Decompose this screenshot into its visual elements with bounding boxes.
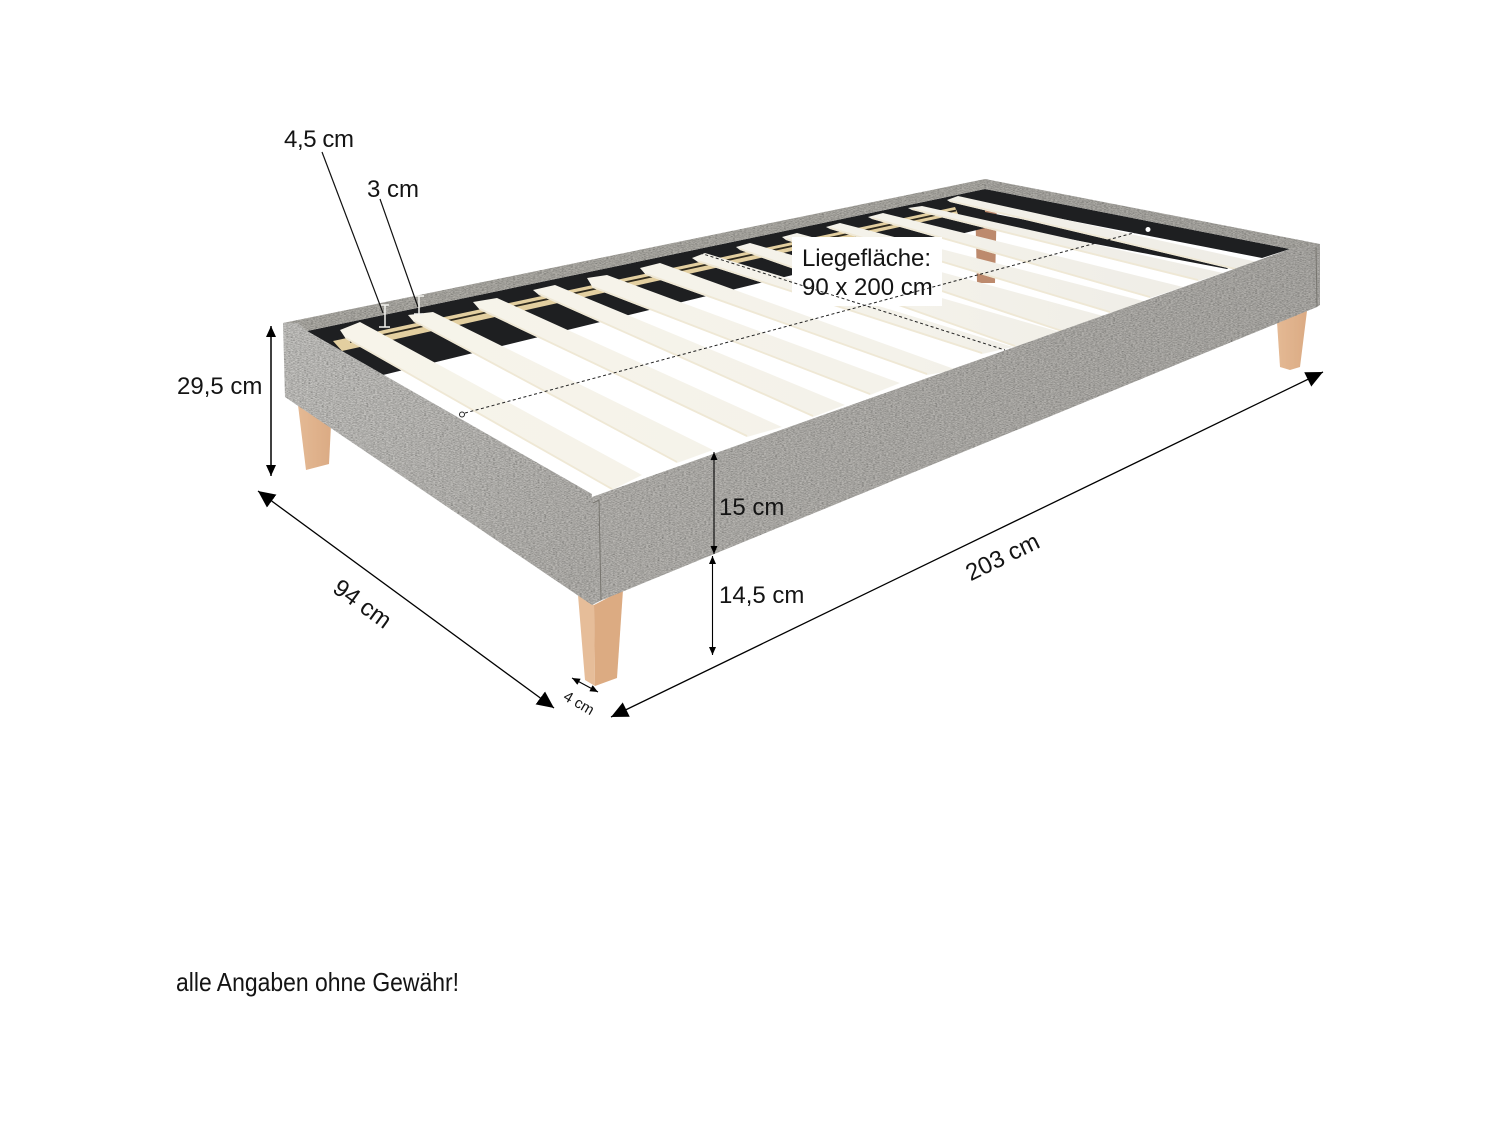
dimension: leg height 14,5 cm: 14,5 cm: [719, 582, 804, 609]
far leg seen through slats: [975, 198, 997, 283]
dimension: length 203 cm: [611, 372, 1323, 717]
dimension: frame height 15 cm: 15 cm: [719, 494, 784, 521]
slat dimension: 3 cm: 3 cm: [367, 176, 419, 203]
dark base band under the slats: [307, 189, 1290, 375]
label box: sleeping surface: [792, 237, 942, 306]
label box: sleeping surface: 90 x 200 cm: [802, 274, 933, 301]
disclaimer: alle Angaben ohne Gewähr!: [176, 967, 459, 997]
slat dimension: 3 cm: [367, 176, 424, 314]
left leg: [298, 405, 331, 470]
dimension: width 94 cm: 94 cm: [328, 574, 396, 634]
dimension: width 94 cm: [258, 491, 554, 708]
wooden cross beam: [333, 207, 958, 351]
corner seams: [593, 247, 1317, 600]
dimension: length 203 cm: 203 cm: [961, 528, 1044, 587]
long front panel: [592, 244, 1320, 605]
dimension: height 29,5 cm: 29,5 cm: [177, 373, 262, 400]
dimension: leg width 4 cm: 4 cm: [560, 688, 597, 719]
back rim: [283, 179, 1320, 331]
slats: [340, 196, 1262, 490]
label box: sleeping surface: Liegefläche:: [802, 245, 931, 272]
front leg: [578, 590, 623, 686]
dimension: leg height 14,5 cm: [712, 556, 804, 655]
dimension: frame height 15 cm: [714, 452, 784, 554]
slat dimension: 4,5 cm: [284, 126, 390, 327]
bed frame illustration: [283, 179, 1320, 686]
slat underside edges: [346, 201, 1240, 489]
right leg: [1277, 311, 1307, 370]
left short panel: [283, 323, 592, 605]
slat dimension: 4,5 cm: 4,5 cm: [284, 126, 354, 153]
dashed diagonals of sleeping surface: [460, 227, 1150, 417]
